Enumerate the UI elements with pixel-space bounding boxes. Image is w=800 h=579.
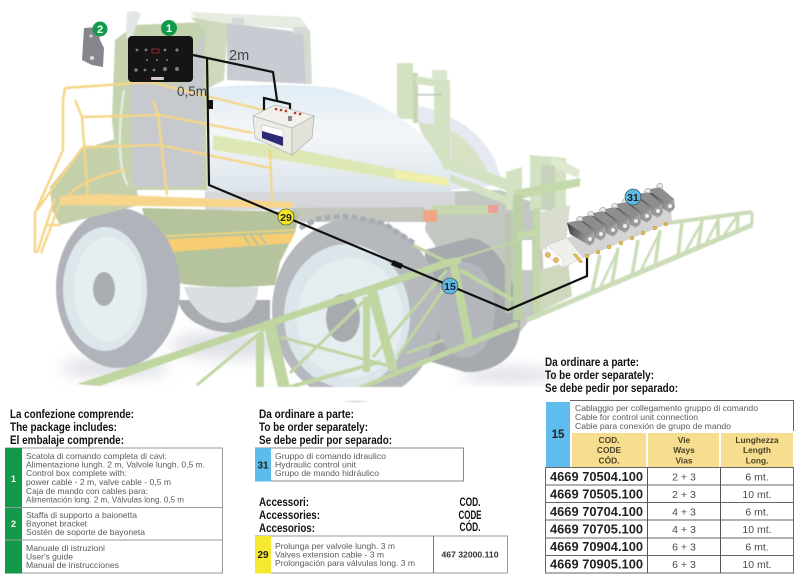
clip strip below the illustration — [60, 387, 560, 401]
cab — [112, 11, 312, 190]
far rear wheel — [425, 238, 520, 372]
table header: Vie — [678, 435, 691, 445]
panel: extension cable 29: Prolongación para válvulas long. 3 m — [275, 558, 415, 568]
item: manual: User's guide — [26, 552, 73, 562]
table rows: 6 mt. — [745, 472, 769, 484]
rear frame bars and lights — [423, 178, 580, 320]
rear tank bulge — [415, 105, 503, 190]
table header — [572, 433, 793, 467]
table title — [546, 400, 794, 467]
panel: hydraulic unit 31: Grupo de mando hidráulico — [275, 468, 379, 478]
heading: order separately (middle) — [259, 409, 392, 447]
cable connectors — [207, 100, 403, 269]
panel: hydraulic unit 31: Hydraulic control unit — [275, 460, 357, 470]
callout: 1: 1 — [166, 23, 172, 35]
front wheel — [56, 208, 180, 368]
yellow platform — [60, 194, 293, 208]
heading: code column: CODE — [458, 510, 482, 522]
item 1 — [11, 451, 205, 504]
item: manual: Manual de instrucciones — [26, 560, 119, 570]
boom mast — [397, 63, 580, 210]
right boom truss — [527, 212, 752, 320]
item 1: Control box complete with: — [26, 468, 127, 478]
illustration: faded sprayer machine — [35, 11, 752, 402]
callout: 29 — [278, 209, 294, 225]
table title: Cable for control unit connection — [575, 412, 698, 422]
valve modules — [567, 183, 675, 246]
heading: package includes: El embalaje comprende: — [10, 435, 124, 447]
label: 0,5m: 0,5m — [177, 83, 207, 99]
icon: bayonet bracket — [82, 27, 104, 67]
table rows: 4669 70705.100 — [550, 522, 643, 536]
heading: accessories: Accessories: — [259, 510, 320, 522]
table rows: 6 mt. — [745, 506, 769, 518]
heading: order separately (middle): Se debe pedir por separado: — [259, 435, 392, 447]
handrails — [35, 82, 272, 253]
front nose — [50, 136, 140, 225]
heading: order separately (right): Da ordinare a parte: — [545, 357, 639, 369]
table: cable 15 — [545, 400, 794, 573]
item: manual: Manuale di istruzioni — [26, 543, 105, 553]
icon: battery — [253, 105, 314, 155]
callout: 1 — [161, 20, 177, 36]
item 1: Alimentazione lungh. 2 m, Valvole lungh. 0,5 m. — [26, 460, 205, 470]
callout: 15: 15 — [444, 281, 456, 293]
ground shadows — [60, 331, 560, 383]
item 1: power cable - 2 m, valve cable - 0,5 m — [26, 477, 171, 487]
table header: Vias — [675, 456, 693, 466]
heading: order separately (right): Se debe pedir por separado: — [545, 383, 678, 395]
item: manual — [26, 543, 119, 570]
table rows: 4669 70505.100 — [550, 486, 643, 502]
item 2 — [11, 510, 145, 537]
cable harness — [193, 55, 587, 310]
green hull — [142, 208, 300, 287]
heading: code column: COD. — [460, 497, 480, 509]
table rows: 2 + 3 — [672, 472, 696, 484]
panel: extension cable 29 — [255, 536, 508, 574]
panel: hydraulic unit 31: 31 — [257, 460, 269, 472]
tank — [205, 85, 452, 195]
table header: COD. — [599, 435, 619, 445]
table title: Cablaggio per collegamento gruppo di comando — [575, 403, 758, 413]
front boom truss — [77, 257, 519, 387]
panel: package contents — [5, 448, 222, 574]
panel: extension cable 29: Prolunga per valvole lungh. 3 m — [275, 541, 395, 551]
item 1: Scatola di comando completa di cavi: — [26, 451, 167, 461]
table rows: 6 + 3 — [672, 559, 696, 571]
table rows: 6 mt. — [745, 542, 769, 554]
table header: Lunghezza — [735, 435, 779, 445]
item 2: Staffa di supporto a baionetta — [26, 510, 137, 520]
heading: order separately (middle): To be order separately: — [259, 422, 368, 434]
heading: code column — [458, 497, 482, 534]
table header: Long. — [746, 456, 768, 466]
heading: accessories — [259, 497, 320, 535]
table rows: 4669 70704.100 — [550, 504, 643, 519]
heading: accessories: Accessori: — [259, 497, 309, 509]
brass fittings — [545, 222, 668, 263]
item 1: Caja de mando con cables para: — [26, 486, 148, 496]
item 2: 2 — [11, 519, 16, 529]
heading: order separately (right): To be order separately: — [545, 370, 654, 382]
heading: code column: CÓD. — [460, 521, 480, 534]
panel: extension cable 29: 467 32000.110 — [442, 550, 499, 560]
inner middle wheel — [178, 287, 270, 332]
table rows: 4 + 3 — [672, 524, 696, 536]
heading: accessories: Accesorios: — [259, 523, 315, 535]
callout: 29: 29 — [280, 212, 292, 224]
table header: Ways — [673, 445, 695, 455]
panel: extension cable 29: 29 — [257, 550, 269, 561]
icon: valve manifold — [545, 183, 675, 268]
heading: package includes — [10, 409, 134, 447]
table rows: 10 mt. — [742, 489, 772, 501]
heading: order separately (right) — [545, 357, 678, 395]
item 2: Bayonet bracket — [26, 518, 88, 528]
callout: 2 — [92, 22, 108, 36]
heading: order separately (middle): Da ordinare a parte: — [259, 409, 354, 421]
table header: Length — [743, 445, 771, 455]
item 1: Alimentación long. 2 m, Válvulas long. 0,5 m — [26, 494, 184, 504]
callout: 2: 2 — [97, 24, 103, 36]
panel: extension cable 29: Valves extension cable - 3 m — [275, 550, 384, 560]
table rows: 2 + 3 — [672, 489, 696, 501]
heading: package includes: La confezione comprende: — [10, 409, 134, 421]
callout: 31: 31 — [627, 192, 639, 204]
item 1: 1 — [11, 474, 16, 484]
callout: 31 — [625, 189, 641, 205]
table header: CODE — [597, 445, 622, 455]
table rows: 4 + 3 — [672, 506, 696, 518]
table rows: 4669 70905.100 — [550, 556, 643, 572]
manifold body — [545, 200, 672, 268]
panel: hydraulic unit 31: Gruppo di comando idraulico — [275, 451, 386, 461]
table rows: 4669 70904.100 — [550, 539, 643, 554]
icon: control box — [128, 36, 193, 82]
table rows: 10 mt. — [742, 524, 772, 536]
table title: Cable para conexión de grupo de mando — [575, 421, 731, 431]
table title: 15 — [552, 429, 565, 441]
table header: CÓD. — [599, 454, 619, 466]
rear frame — [425, 190, 545, 345]
table rows — [545, 467, 794, 573]
under tank band — [205, 192, 455, 210]
heading: package includes: The package includes: — [10, 422, 117, 434]
item 2: Sostén de soporte de bayoneta — [26, 527, 145, 537]
rear wheel — [272, 216, 440, 402]
table rows: 6 + 3 — [672, 542, 696, 554]
table rows: 4669 70504.100 — [550, 469, 643, 484]
panel: hydraulic unit 31 — [255, 448, 464, 482]
table rows: 10 mt. — [742, 559, 772, 571]
label: 2m: 2m — [229, 48, 249, 64]
tank stripes — [213, 135, 449, 186]
callout: 15 — [442, 278, 458, 294]
